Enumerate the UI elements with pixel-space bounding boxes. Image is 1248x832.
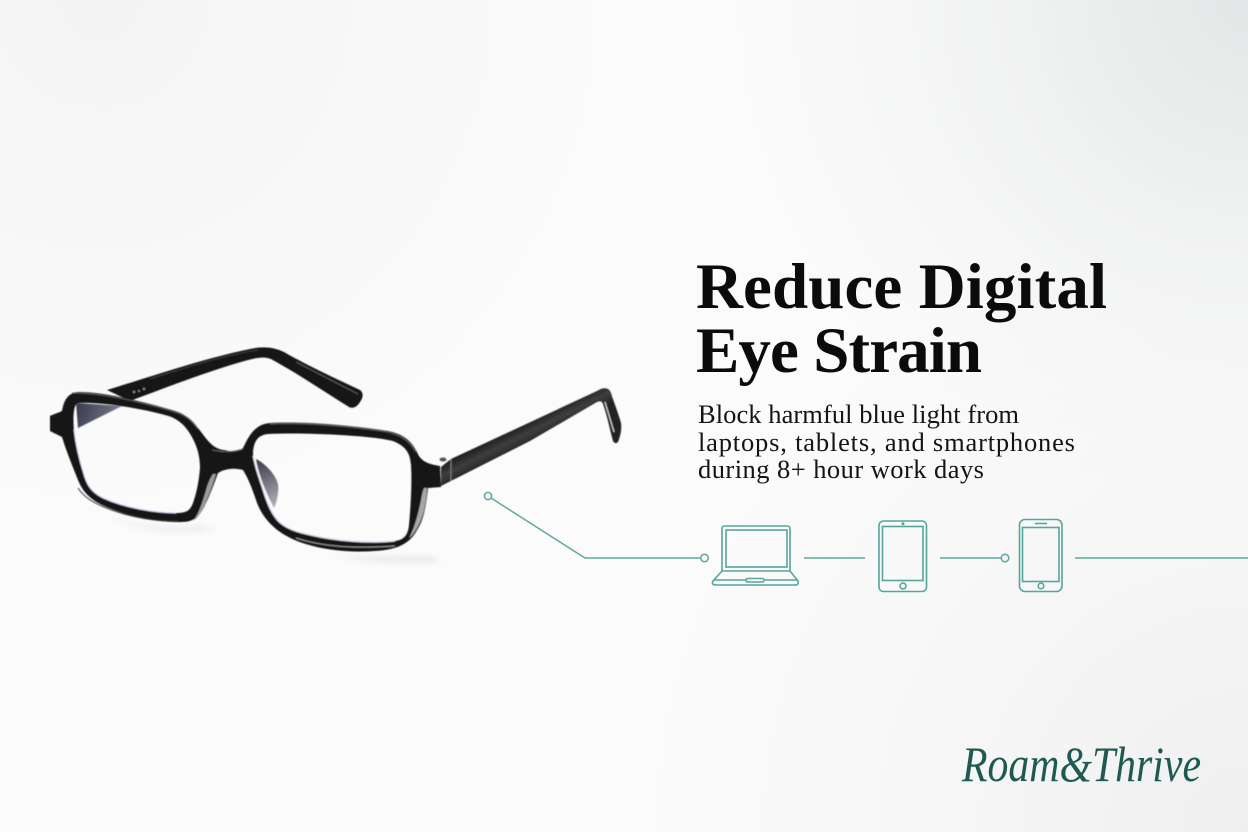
back temple arm <box>107 347 363 408</box>
description text: Block harmful blue light from <box>698 399 1019 429</box>
description text: during 8+ hour work days <box>698 454 984 484</box>
lens tint: right lens nose pad <box>256 459 278 508</box>
title: Reduce Digital <box>696 251 1107 323</box>
description text <box>698 399 1075 484</box>
icon: tablet <box>879 521 926 592</box>
logo: Roam&Thrive: Roam&Thrive <box>961 736 1201 792</box>
frame reflections <box>193 474 216 521</box>
hinge rivet <box>440 458 446 462</box>
icon: laptop <box>712 526 798 585</box>
front temple arm <box>440 388 621 486</box>
temple marking <box>133 388 145 393</box>
title <box>696 251 1107 387</box>
connector line from glasses to device icons <box>484 492 1248 562</box>
lens tint: arm seen through the left lens <box>76 403 122 428</box>
front frame <box>50 392 441 552</box>
soft shadow <box>110 518 440 563</box>
title: Eye Strain <box>696 315 982 387</box>
product photo: black eyeglasses <box>50 347 621 563</box>
frame gloss and blue coating <box>72 393 416 547</box>
description text: laptops, tablets, and smartphones <box>698 427 1075 457</box>
icon: smartphone <box>1020 520 1062 592</box>
